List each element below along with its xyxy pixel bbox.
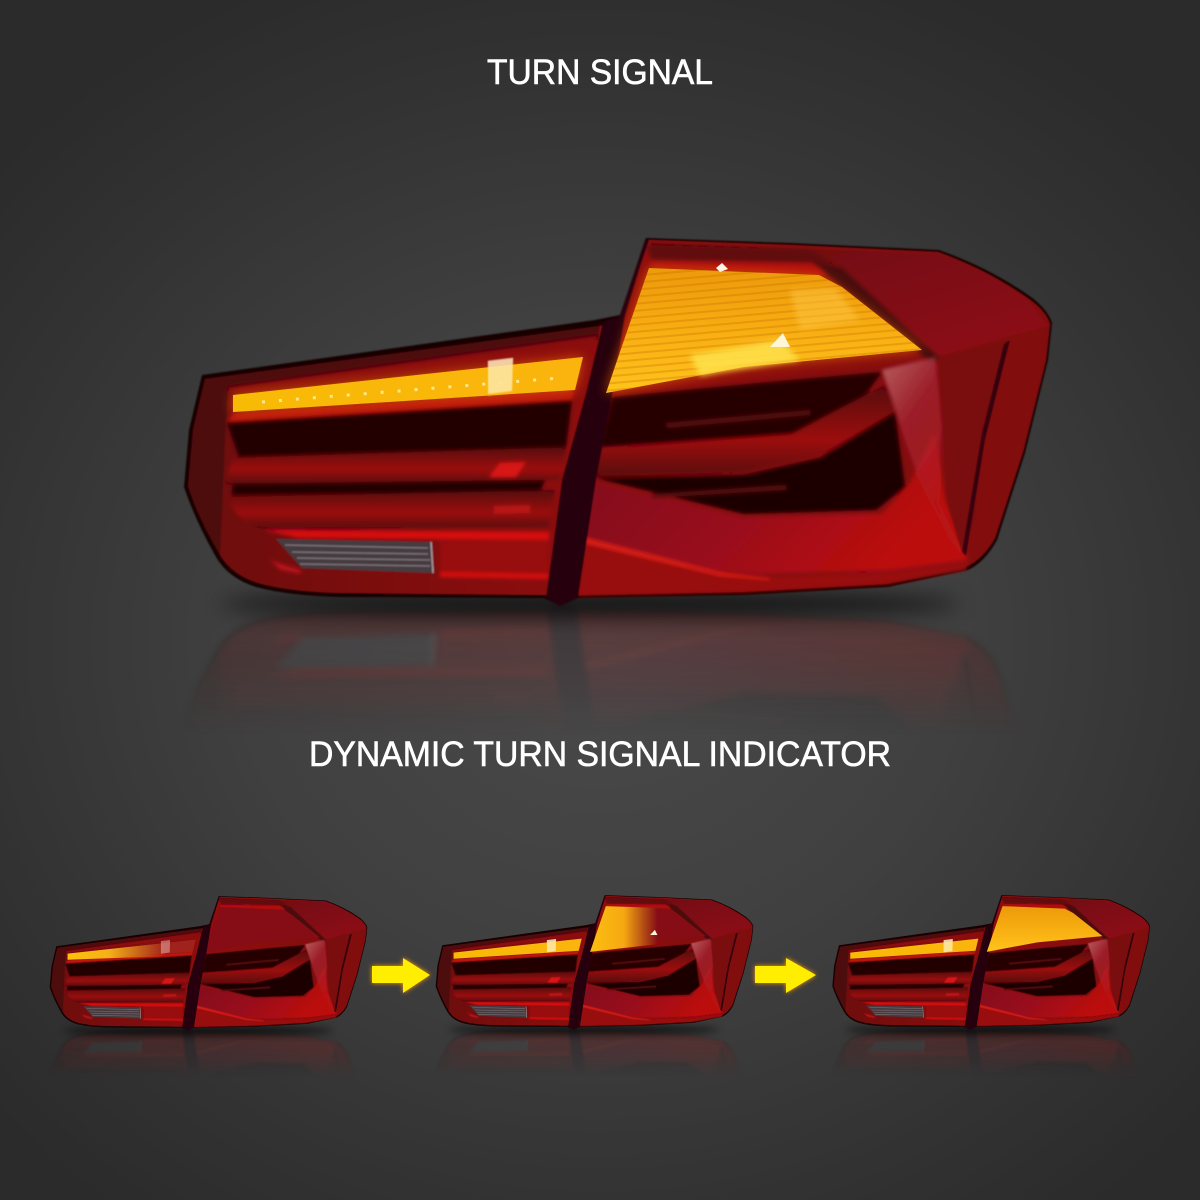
step 3 tail light (832, 895, 1150, 1067)
main tail light (184, 238, 1052, 606)
step 2 tail light (436, 895, 754, 1066)
main tail light contact shadow (220, 592, 960, 616)
left lit amber bar (233, 357, 583, 412)
main tail light reflection (205, 609, 995, 706)
right lit amber panel (606, 263, 922, 393)
amber glow (233, 268, 922, 412)
heading: dynamic turn signal indicator: DYNAMIC TURN SIGNAL INDICATOR (309, 735, 891, 774)
heading: turn signal: TURN SIGNAL (487, 53, 713, 92)
arrow 1 (372, 958, 430, 993)
arrow 2 (755, 958, 816, 993)
step 1 tail light (50, 896, 368, 1068)
